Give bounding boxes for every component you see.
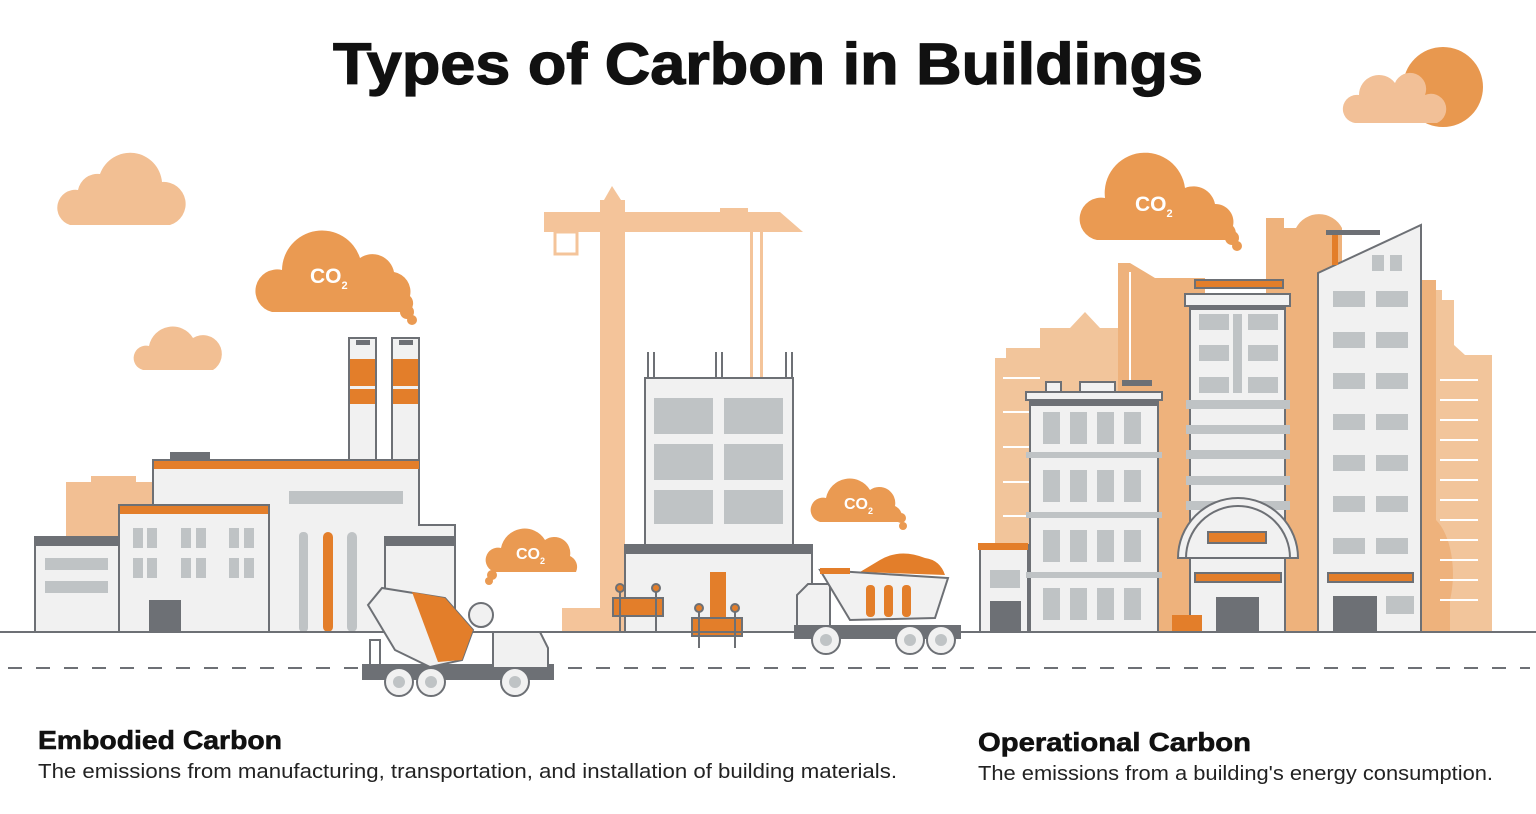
caption: embodied carbon: Embodied Carbon: [38, 725, 282, 755]
icon: sun with cloud: [1343, 47, 1483, 127]
CO2 cloud right: CO: [1135, 193, 1166, 216]
ground lines: [0, 631, 1536, 633]
CO2 cloud small middle-right: 2: [868, 506, 873, 516]
CO2 cloud small middle-left: [485, 529, 577, 585]
caption: operational carbon: Operational Carbon: [978, 727, 1251, 757]
building under construction: [625, 352, 812, 632]
caption: operational carbon: The emissions from a building's energy consumption.: [978, 763, 1493, 785]
CO2 cloud left: [255, 230, 417, 325]
factory: [35, 338, 455, 632]
dump truck: [795, 553, 960, 654]
CO2 cloud small middle-left: CO: [516, 546, 540, 563]
crane: [544, 186, 803, 632]
title: Types of Carbon in Buildings: [333, 32, 1203, 97]
caption: operational carbon: [978, 727, 1493, 785]
CO2 cloud small middle-right: [811, 479, 907, 530]
caption: embodied carbon: The emissions from manufacturing, transportation, and installation of building materials.: [38, 761, 897, 783]
CO2 cloud left: 2: [342, 280, 348, 292]
CO2 cloud right: [1080, 153, 1242, 251]
concrete mixer truck: [363, 588, 553, 696]
CO2 cloud small middle-left: 2: [540, 556, 545, 566]
cloud left small: [134, 327, 222, 370]
CO2 cloud small middle-right: CO: [844, 496, 868, 513]
CO2 cloud left: CO: [310, 265, 342, 288]
cloud left top: [57, 153, 186, 225]
barriers: [613, 584, 742, 648]
caption: embodied carbon: [38, 725, 897, 783]
city buildings: [978, 225, 1421, 632]
background city: [995, 214, 1492, 632]
CO2 cloud right: 2: [1166, 208, 1173, 220]
